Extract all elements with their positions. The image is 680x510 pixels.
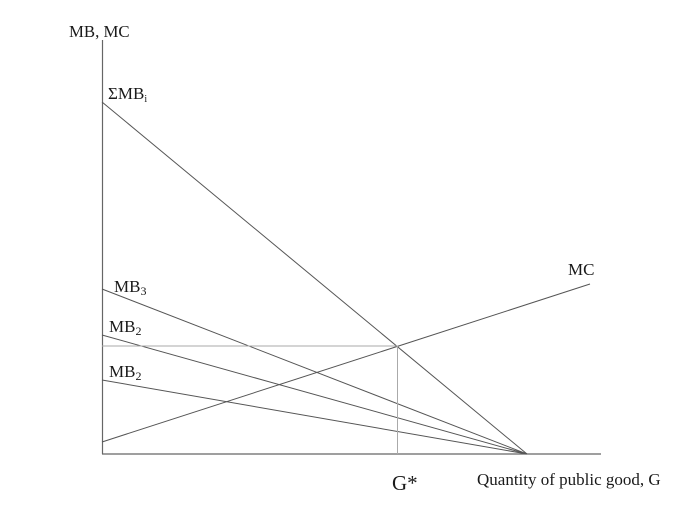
label: upper MB2: 2 [135,324,141,338]
label: lower MB2: 2 [135,369,141,383]
label: lower MB2: MB [109,362,135,381]
label: MB3: 3 [140,284,146,298]
line: sum of marginal benefits [102,102,527,454]
y axis [102,40,104,454]
G* label: G* [392,471,418,495]
y axis label: MB, MC [69,22,130,41]
x axis label: Quantity of public good, G [477,470,661,489]
line: marginal cost [102,284,590,442]
label: upper MB2: MB [109,317,135,336]
line: upper MB2 [102,335,527,454]
guide: horizontal to optimum [102,345,397,347]
x axis [102,453,601,455]
line: MB3 [102,289,527,454]
guide: vertical to G* [396,346,398,454]
label: sum MB: ΣMB [108,84,144,103]
line: lower MB2 [102,380,527,454]
label: MB3: MB [114,277,140,296]
label: MC: MC [568,260,594,279]
label: sum MB: i [144,94,147,105]
